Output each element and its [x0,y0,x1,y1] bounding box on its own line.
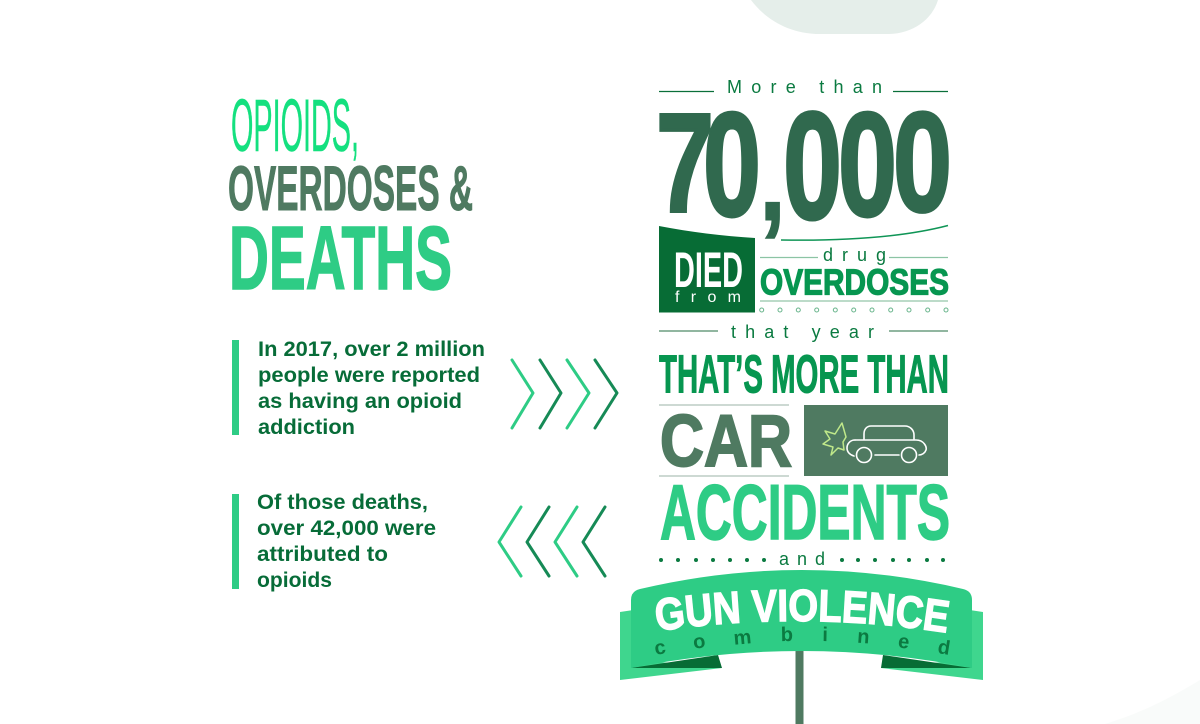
big number: 70,000 [656,80,952,252]
banner fold: left [631,655,722,668]
decorative curve under number [781,226,948,240]
label: drug overdoses: OVERDOSES [760,262,949,302]
callout: addiction statistic: as having an opioid [258,390,462,413]
panel: car crash icon [804,405,948,476]
dotted row with and: and [779,549,825,569]
callout: opioid deaths statistic: over 42,000 were [257,517,436,540]
big number: 70,000: , [759,114,786,246]
arrows: chevrons pointing left [499,507,605,576]
heading: that's more than: THAT’S MORE THAN [659,344,949,404]
banner text: combined: o [692,630,707,654]
banner text: combined: e [897,630,911,654]
callout: addiction statistic [232,338,485,439]
title [228,84,473,309]
banner text: combined: n [857,626,870,648]
callout: opioid deaths statistic: attributed to [257,543,388,566]
dotted row with and [659,549,945,569]
label: drug overdoses: drug [823,245,886,265]
callout: addiction statistic: people were reported [258,364,480,387]
icon: car [847,426,926,462]
panel: died from [659,226,755,312]
banner text: combined: i [822,624,828,646]
banner flap: right [881,609,983,680]
banner text: combined [653,624,952,660]
banner text: combined: b [781,624,793,646]
icon: crash burst [823,423,846,455]
background blob: bottom right [1105,680,1200,724]
banner text: combined: d [936,636,952,660]
panel: died from: DIED [674,242,743,298]
heading: accidents: ACCIDENTS [660,468,950,556]
big number: 70,000: 0 [893,83,952,242]
callout: opioid deaths statistic [232,491,436,592]
big number: 70,000: 0 [838,82,897,248]
banner fold: right [881,655,972,668]
background blob: top [751,0,938,34]
callout: addiction statistic: In 2017, over 2 million [258,338,485,361]
callout: opioid deaths statistic: Of those deaths, [257,491,428,514]
arrows: chevrons pointing right [512,360,617,428]
dotted row: small circles [760,308,948,312]
title: OPIOIDS, [231,84,359,167]
callout: addiction statistic: addiction [258,416,355,439]
title line: overdoses: OVERDOSES & [228,154,473,224]
label: car: CAR [660,401,792,482]
big number: 70,000: 0 [703,82,761,248]
pole [796,645,804,724]
banner body [631,570,972,668]
big number: 70,000: 0 [783,80,842,252]
banner: gun violence combined [620,570,983,680]
panel: died from: from [675,289,741,306]
label: that year: that year [731,322,874,342]
banner flap: left [620,609,722,680]
label: drug overdoses [760,245,949,302]
banner text: combined: m [733,626,752,650]
big number: 70,000: 7 [656,84,714,242]
heading: more than: More than [727,77,882,97]
banner text: combined: c [653,636,667,660]
banner text: gun violence: GUN VIOLENCE [656,588,950,634]
callout: opioid deaths statistic: opioids [257,569,332,592]
title line: deaths: DEATHS [229,209,452,309]
